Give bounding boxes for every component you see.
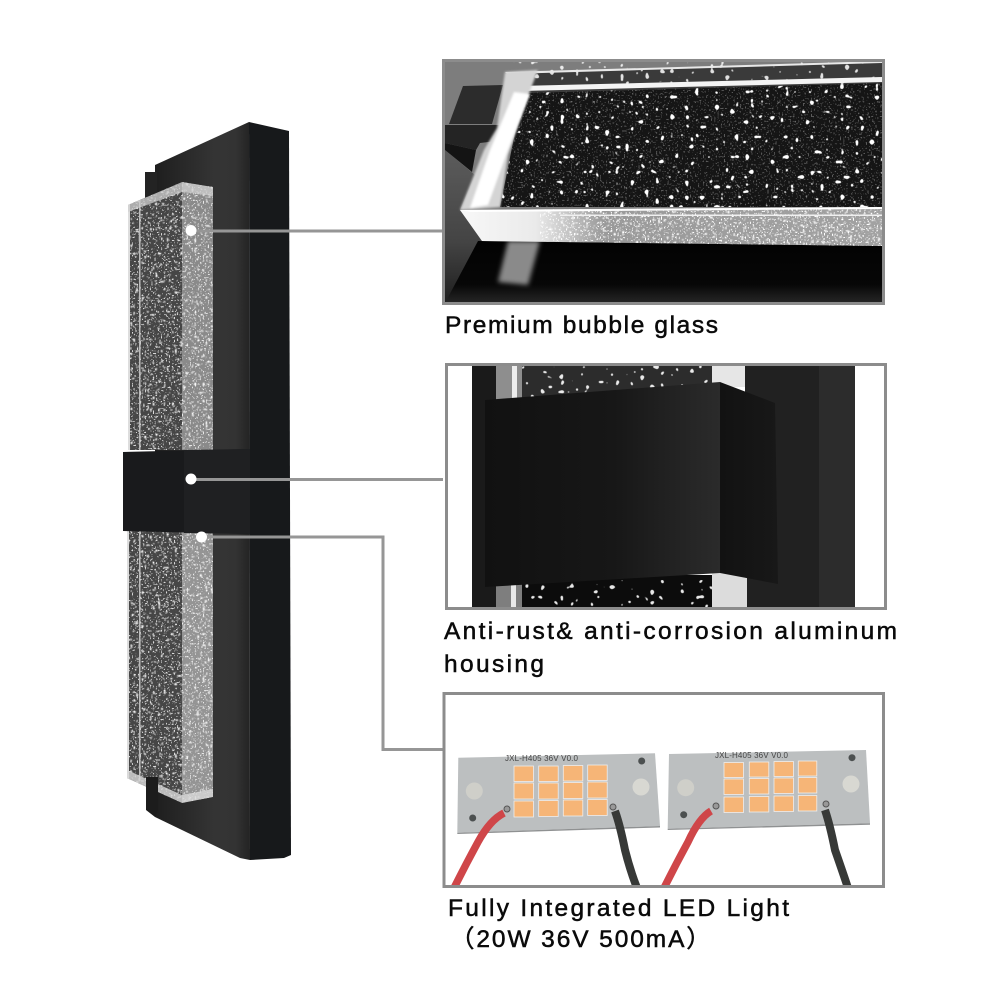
caption: LED light: （20W 36V 500mA） [450, 925, 713, 953]
product photo: wall lamp [120, 122, 291, 860]
lower mounting tab [146, 777, 158, 817]
dark mounting bracket [445, 85, 505, 172]
caption: LED light [448, 895, 789, 953]
lamp back plate front face [249, 122, 291, 860]
wires [454, 801, 848, 888]
caption: premium bubble glass: Premium bubble glass [445, 312, 718, 339]
LED board 2: JXL-H405 36V V0.0 [715, 751, 789, 760]
LED board 2 [668, 750, 870, 830]
left glowing glass edge [460, 70, 538, 210]
panel: premium bubble glass [444, 60, 885, 304]
lamp back plate close-up [472, 365, 496, 608]
lamp back plate side face [155, 122, 250, 860]
LED board 1 [457, 753, 660, 834]
LED board 1: JXL-H405 36V V0.0 [505, 754, 579, 763]
glass close-up [496, 365, 747, 608]
light beam on wall [498, 241, 540, 285]
glass body [505, 62, 882, 93]
glass bright edges [505, 62, 882, 74]
caption: LED light: Fully Integrated LED Light [448, 895, 789, 922]
caption: aluminum housing [444, 618, 897, 678]
housing front [485, 382, 720, 587]
middle aluminum housing [123, 449, 250, 534]
lower glowing glass band [460, 207, 882, 246]
leader: LED [196, 532, 443, 750]
panel: LED boards [444, 694, 884, 888]
caption: aluminum housing: housing [444, 651, 544, 678]
callout leader lines [186, 225, 443, 750]
LED chips [514, 765, 607, 817]
upper mounting tab [145, 172, 157, 206]
upper bubble glass [128, 182, 213, 450]
caption: aluminum housing: Anti-rust& anti-corrosion aluminum [444, 618, 897, 645]
lower bubble glass [127, 531, 213, 803]
leader: housing [186, 474, 443, 484]
housing side [720, 382, 778, 584]
panel: aluminum housing [446, 364, 886, 608]
LED chips [724, 761, 817, 812]
leader: glass [186, 225, 443, 236]
lower wall shadow [445, 150, 482, 303]
